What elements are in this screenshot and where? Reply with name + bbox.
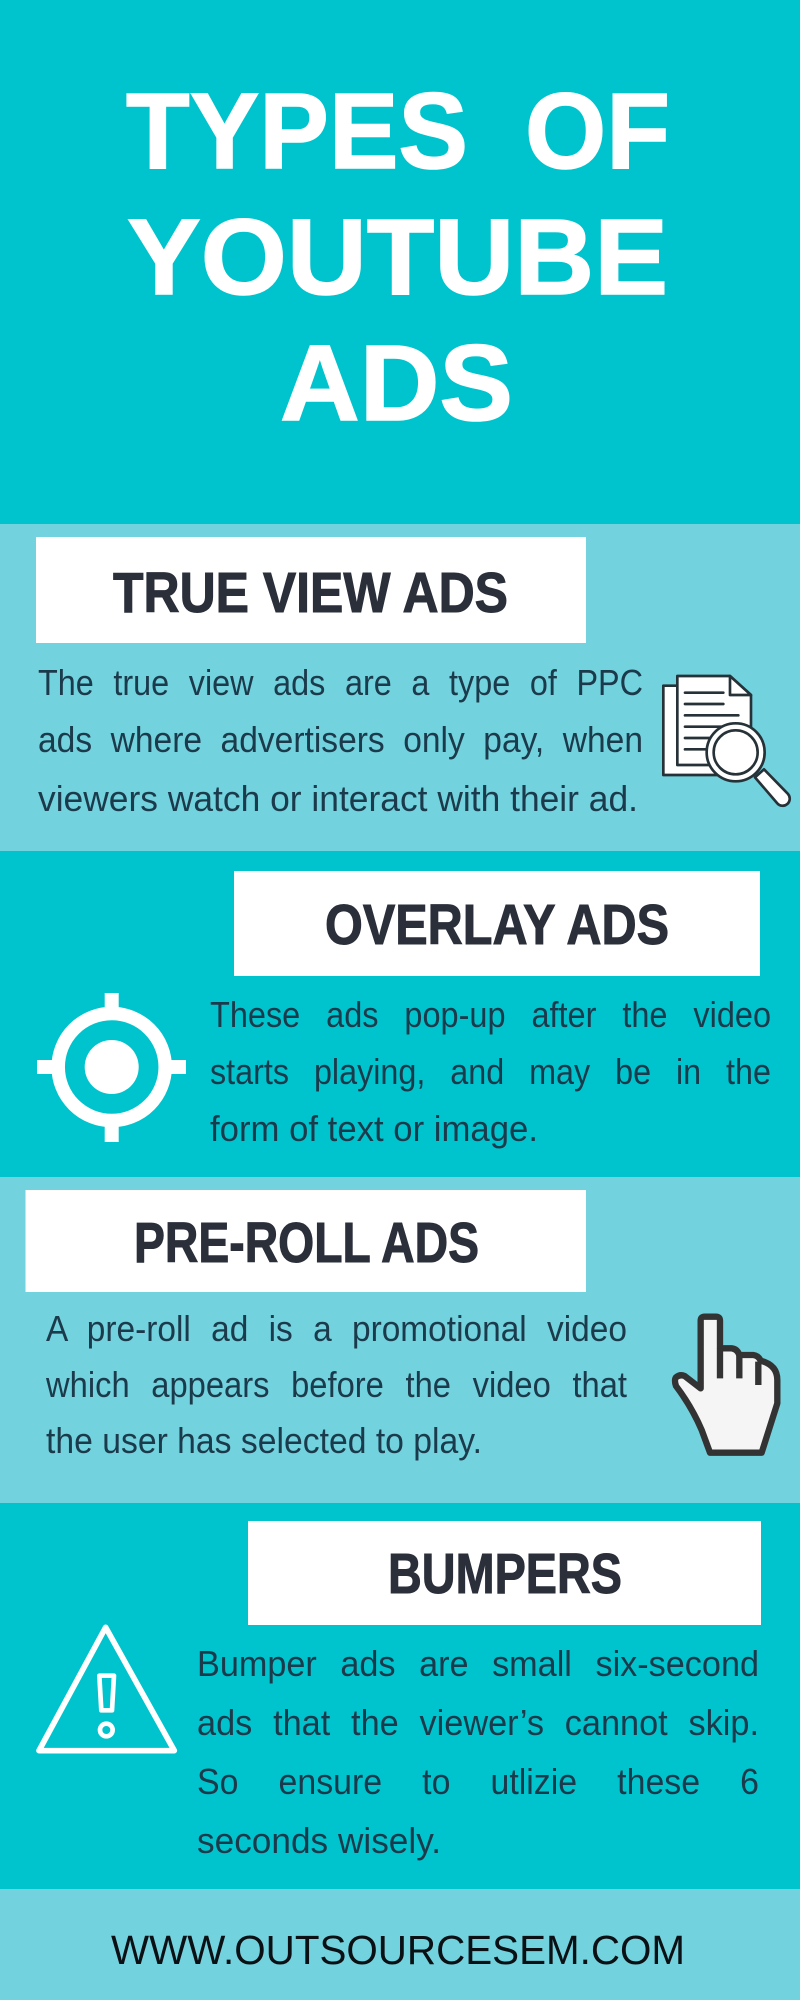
text block: pre-roll description (45, 1308, 627, 1461)
heading: true view ads (36, 537, 586, 643)
icon: pointing hand (675, 1317, 777, 1453)
title text: ADS (280, 322, 513, 443)
text block: bumpers description: seconds wisely. (197, 1820, 441, 1861)
heading: overlay ads (234, 871, 760, 976)
heading: pre-roll ads (26, 1190, 586, 1292)
text block: bumpers description: So ensure to utlizie these 6 (197, 1761, 759, 1802)
text block: bumpers description: Bumper ads are small six-second (197, 1643, 759, 1684)
heading: true view ads: TRUE VIEW ADS (113, 561, 508, 625)
panel: true view ads (0, 524, 800, 851)
panel: pre-roll ads (0, 1177, 800, 1503)
title text: OF (525, 70, 670, 191)
text block: bumpers description: ads that the viewer’s cannot skip. (197, 1702, 759, 1743)
icon: document with magnifying glass (663, 676, 790, 806)
text block: true view description: viewers watch or interact with their ad. (38, 778, 638, 819)
heading: pre-roll ads: PRE-ROLL ADS (134, 1211, 479, 1275)
heading: overlay ads: OVERLAY ADS (325, 893, 669, 957)
panel: overlay ads (0, 851, 800, 1177)
title text (126, 70, 670, 443)
title text: YOUTUBE (127, 196, 668, 317)
text block: true view description: ads where advertisers only pay, when (38, 719, 643, 760)
heading: bumpers: BUMPERS (388, 1542, 622, 1606)
icon: target (37, 993, 186, 1142)
text block: overlay description (210, 994, 771, 1149)
text block: pre-roll description: the user has selected to play. (46, 1420, 482, 1461)
panel: footer (0, 1889, 800, 2000)
footer url: WWW.OUTSOURCESEM.COM (111, 1927, 685, 1973)
panel: bumpers (0, 1503, 800, 1889)
text block: pre-roll description: A pre-roll ad is a promotional video (46, 1308, 627, 1349)
icon: warning triangle (39, 1627, 174, 1751)
text block: true view description (38, 662, 643, 819)
heading: bumpers (248, 1521, 761, 1625)
panel: title (0, 0, 800, 524)
title text: TYPES (126, 70, 468, 191)
text block: pre-roll description: which appears before the video that (45, 1364, 627, 1405)
text block: bumpers description (197, 1643, 759, 1861)
text block: overlay description: form of text or image. (210, 1108, 538, 1149)
text block: true view description: The true view ads are a type of PPC (38, 662, 643, 703)
